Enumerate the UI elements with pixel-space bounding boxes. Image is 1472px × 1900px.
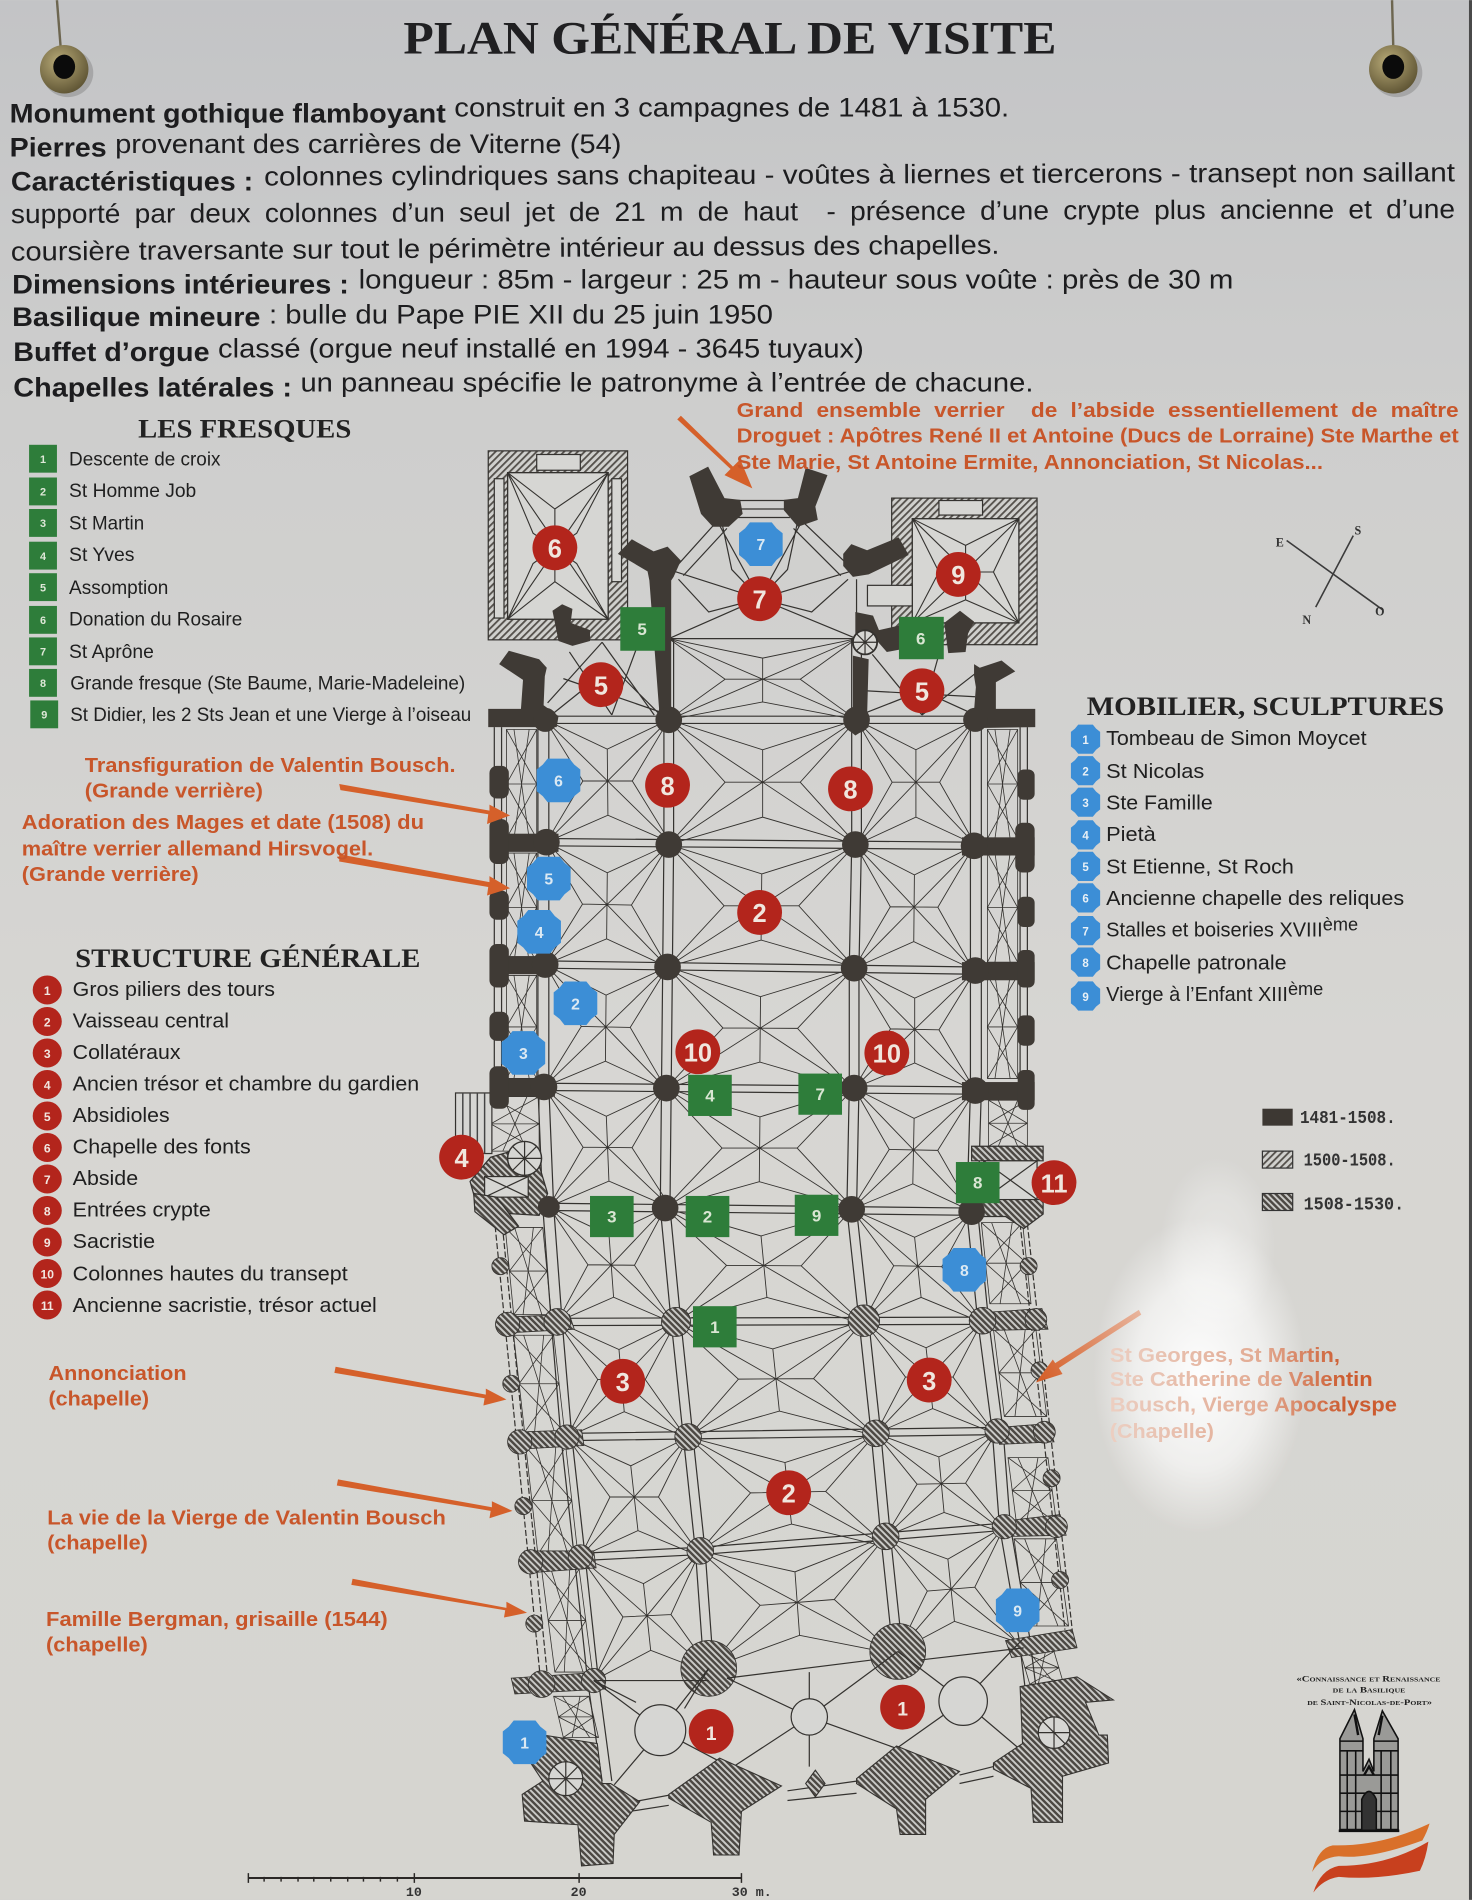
intro text block: Chapelles latérales : [13,372,292,402]
legend list: structure: 4 [44,1078,51,1092]
legend list: mobilier: 1 [1082,735,1089,747]
intro text block: provenant des carrières de Viterne (54) [115,129,622,159]
intro text block: Monument gothique flamboyant [10,99,446,129]
scale bar: 30 m. [732,1885,772,1900]
legend list: fresques: 1 [40,454,46,466]
compass: N [1302,613,1311,627]
markers on plan: green fresques: 9 [812,1206,821,1225]
callout: Adoration des Mages: maître verrier allemand Hirsvogel. [22,839,373,861]
legend list: structure: Abside [73,1168,138,1190]
callout: Annonciation: Annonciation [48,1363,187,1385]
legend list: fresques: 5 [40,582,46,594]
legend list: fresques: 8 [40,678,46,690]
scale bar: 20 [571,1885,587,1900]
legend list: structure: 7 [44,1173,51,1187]
heading: structure générale: STRUCTURE GÉNÉRALE [75,943,420,973]
legend list: structure: Ancienne sacristie, trésor actuel [73,1295,377,1317]
logo text: de la Basilique [1333,1686,1405,1695]
legend list: mobilier: St Etienne, St Roch [1106,857,1294,879]
markers on plan: green fresques: 3 [607,1208,617,1227]
markers on plan: blue mobilier: 1 [520,1735,529,1752]
legend list: fresques: St Yves [69,544,134,566]
callout: La vie de la Vierge: (chapelle) [47,1533,148,1555]
legend list: mobilier: 9 [1082,992,1089,1004]
legend list: mobilier: Ancienne chapelle des reliques [1106,888,1404,910]
intro text block [10,92,1456,402]
legend item: 1481-1508 [1262,1109,1396,1129]
legend item: 1500-1508: 1500-1508. [1304,1152,1396,1172]
markers on plan: green fresques [590,607,1000,1347]
legend list: mobilier: St Nicolas [1106,761,1204,783]
legend list: mobilier: ème [1288,979,1323,999]
scale bar [248,1873,772,1900]
callout: abside glass: Droguet : Apôtres René II et Antoine (Ducs de Lorraine) Ste Marthe et [737,425,1459,447]
markers on plan: red structure: 10 [873,1041,901,1069]
legend list: fresques: Donation du Rosaire [69,608,242,630]
legend list: mobilier: Tombeau de Simon Moycet [1106,728,1367,750]
markers on plan: red structure: 7 [753,586,767,614]
nave piers, campaign 1508-1530 [492,1258,1077,1698]
arrow: St Georges chapel [1036,1310,1141,1383]
markers on plan: red structure: 1 [706,1723,717,1745]
markers on plan: blue mobilier: 3 [519,1046,528,1063]
legend list: fresques: Grande fresque (Ste Baume, Marie-Madeleine) [70,673,465,695]
legend list: structure: Absidioles [73,1105,170,1127]
intro text block: colonnes cylindriques sans chapiteau - voûtes à liernes et tiercerons - transept non saillant [264,157,1456,192]
callout: St Georges, faded by glare: (Chapelle) [1110,1421,1214,1443]
icon: basilica facade [1339,1710,1399,1831]
legend list: fresques: 9 [41,710,47,722]
legend list: mobilier: 8 [1082,958,1089,970]
legend list: structure: 8 [44,1204,51,1218]
intro text block: Basilique mineure [12,302,260,332]
chapel lattices [491,730,1069,1737]
legend list: structure: 3 [44,1047,51,1061]
legend list: fresques: St Aprône [69,641,154,663]
legend list: mobilier: Chapelle patronale [1106,952,1287,974]
callout: Adoration des Mages: (Grande verrière) [22,864,199,886]
doubled transverse and longitudinal ribs [538,639,1043,1781]
west spiral stairs [549,1717,1070,1796]
compass: O [1375,605,1385,619]
intro text block: construit en 3 campagnes de 1481 à 1530. [454,92,1009,122]
callout: La vie de la Vierge: La vie de la Vierge de Valentin Bousch [47,1507,446,1529]
callout: St Georges, faded by glare: St Georges, St Martin, [1110,1345,1340,1367]
legend list: structure: 1 [44,984,51,998]
markers on plan: red structure: 8 [843,777,858,805]
legend: building campaigns [1262,1109,1404,1215]
callout: Famille Bergman [46,1609,388,1656]
legend list: fresques: Assomption [69,577,168,599]
panel: structure générale legend [33,943,420,1320]
callout: Famille Bergman: Famille Bergman, grisaille (1544) [46,1609,388,1631]
markers on plan: green fresques: 5 [637,620,647,639]
legend list: structure: 2 [44,1015,51,1029]
legend list: structure: Entrées crypte [73,1200,211,1222]
callout: abside glass: Grand ensemble verrier de l’abside essentiellement de maître [737,400,1459,422]
legend list: mobilier: 5 [1082,862,1089,874]
markers on plan: green fresques: 1 [710,1318,720,1337]
compass: E [1276,536,1284,550]
markers on plan: red structure: 11 [1041,1170,1067,1198]
markers on plan: blue mobilier [502,522,1039,1764]
compass: S [1354,523,1361,537]
transept south porch [972,1146,1043,1229]
floor plan of the basilica [456,451,1113,1866]
markers on plan: green fresques: 2 [703,1208,712,1227]
spiral stair near sacristy [853,630,877,654]
arrow: Transfiguration window [339,784,510,824]
intro text block: un panneau spécifie le patronyme à l’entrée de chacune. [300,367,1033,397]
intro text block: Pierres [10,132,107,162]
apse ribs [548,501,976,715]
markers on plan: red structure: 2 [782,1480,796,1508]
legend item: 1508-1530: 1508-1530. [1304,1195,1404,1215]
hanging string right [1392,0,1393,46]
legend list: mobilier: ème [1323,915,1358,935]
legend list: structure: Collatéraux [73,1042,181,1064]
legend item: 1500-1508 [1262,1151,1396,1172]
legend list: structure: 9 [44,1236,51,1250]
legend list: fresques: 3 [40,518,46,530]
legend list: structure [33,975,419,1320]
legend list: mobilier: Stalles et boiseries XVIII [1106,920,1323,942]
vaults [544,639,1016,1681]
markers on plan: red structure: 3 [922,1368,936,1396]
title: PLAN GÉNÉRAL DE VISITE [403,12,1056,63]
compass [1276,523,1384,627]
transept north porch [456,1093,548,1235]
legend list: mobilier: 2 [1082,767,1089,779]
markers on plan: blue mobilier: 5 [544,872,553,889]
legend list: mobilier: 3 [1082,798,1089,810]
markers on plan: red structure: 10 [684,1039,712,1067]
markers on plan: red structure: 8 [660,773,675,801]
legend list: fresques: 7 [40,647,46,659]
markers on plan: blue mobilier: 8 [960,1263,969,1280]
intro text block: coursière traversante sur tout le périmètre intérieur au dessus des chapelles. [11,230,1000,267]
markers on plan: red structure: 3 [616,1369,630,1397]
icon: right grommet [1369,45,1422,97]
intro text block: Caractéristiques : [11,166,253,196]
markers on plan: green fresques: 6 [916,630,925,649]
callout: Annonciation [48,1363,187,1411]
legend list: structure: Sacristie [73,1231,155,1253]
legend list: fresques: St Didier, les 2 Sts Jean et une Vierge à l’oiseau [70,704,471,726]
legend item: 1508-1530 [1262,1194,1404,1215]
markers on plan: green fresques: 4 [705,1086,715,1105]
legend list: structure: Chapelle des fonts [73,1137,251,1159]
legend list: structure: Ancien trésor et chambre du gardien [73,1074,419,1096]
markers on plan: blue mobilier: 2 [571,996,580,1013]
callout: abside glass [737,400,1459,474]
legend list: mobilier: Ste Famille [1106,792,1213,814]
markers on plan: red structure: 5 [915,678,929,706]
callout: Famille Bergman: (chapelle) [46,1634,148,1656]
legend list: mobilier: Pietà [1106,824,1157,846]
legend list: structure: 11 [41,1299,54,1313]
markers on plan: blue mobilier: 4 [535,925,544,942]
apse piers and buttresses, campaign 1481-1508 [488,467,1035,1225]
legend list: fresques: 6 [40,615,46,627]
markers on plan: blue mobilier: 9 [1013,1603,1022,1620]
callout: St Georges, faded by glare: Bousch, Vierge Apocalyspe [1110,1395,1397,1417]
intro text block: supporté par deux colonnes d’un seul jet de 21 m de haut - présence d’une crypte plus ancienne et d’une [11,194,1455,229]
legend list: structure: 6 [44,1141,51,1155]
markers on plan: red structure [439,525,1076,1754]
legend list: structure: Gros piliers des tours [73,979,275,1001]
logo text [1296,1675,1441,1707]
arrow: Adoration window [339,854,510,895]
legend list: fresques: Descente de croix [69,448,221,470]
arrow: Annonciation [334,1367,506,1406]
arrow: Vie de la Vierge [337,1479,512,1518]
panel: les fresques legend [29,414,471,728]
logo text: «Connaissance et Renaissance [1296,1675,1441,1684]
intro text block: Buffet d’orgue [13,337,210,367]
legend list: structure: 10 [41,1267,54,1281]
logo: Connaissance et Renaissance [1296,1675,1441,1893]
callout: Transfiguration: (Grande verrière) [85,780,263,802]
intro text block: longueur : 85m - largeur : 25 m - hauteur sous voûte : près de 30 m [359,265,1233,295]
legend list: mobilier: 4 [1082,831,1089,843]
legend list: mobilier: 7 [1082,926,1089,938]
left chapel tower [488,451,628,640]
callout: abside glass: Ste Marie, St Antoine Ermite, Annonciation, St Nicolas... [737,452,1323,474]
callout: Adoration des Mages [22,812,424,886]
callout: Transfiguration [85,755,456,802]
markers on plan: red structure: 2 [753,900,767,928]
markers on plan: red structure: 6 [548,535,562,563]
callout: Annonciation: (chapelle) [48,1389,149,1411]
intro text block: : bulle du Pape PIE XII du 25 juin 1950 [269,300,773,330]
scale bar: 10 [406,1885,422,1900]
callout: Transfiguration: Transfiguration de Valentin Bousch. [85,755,456,777]
legend list: fresques: St Martin [69,513,144,535]
legend list: fresques: 4 [40,551,46,563]
legend list: structure: Colonnes hautes du transept [73,1264,348,1286]
markers on plan: blue mobilier: 6 [554,773,563,790]
legend list: structure: Vaisseau central [73,1011,229,1033]
icon: orange flag swoosh [1312,1824,1430,1893]
legend list: fresques: St Homme Job [69,480,196,502]
legend list: mobilier: 6 [1082,894,1089,906]
legend list: mobilier [1071,725,1404,1011]
icon: left grommet [40,45,93,97]
markers on plan: blue mobilier: 7 [756,537,765,554]
arrow: Famille Bergman [351,1579,527,1618]
logo text: de Saint-Nicolas-de-Port» [1307,1698,1432,1707]
markers on plan: red structure: 1 [897,1699,908,1721]
sacristy tower [867,498,1037,645]
heading: les fresques: LES FRESQUES [138,414,351,444]
panel: mobilier, sculptures legend [1071,691,1444,1011]
legend list: fresques [29,445,471,728]
intro text block: Dimensions intérieures : [12,269,349,299]
markers on plan: green fresques: 7 [815,1085,825,1104]
callout: St Georges, faded by glare: Ste Catherine de Valentin [1110,1369,1373,1391]
markers on plan: red structure: 5 [594,672,608,700]
west bays [594,1638,1024,1814]
legend list: structure: 5 [44,1110,51,1124]
heading: mobilier, sculptures: MOBILIER, SCULPTURES [1087,691,1444,721]
legend list: fresques: 2 [40,487,46,499]
markers on plan: green fresques: 8 [973,1174,982,1193]
arrow: abside windows [677,416,752,488]
intro text block: classé (orgue neuf installé en 1994 - 3645 tuyaux) [218,334,864,364]
west facade buttresses [522,1677,1113,1866]
legend item: 1481-1508: 1481-1508. [1300,1109,1396,1129]
legend list: mobilier: Vierge à l’Enfant XIII [1106,984,1288,1006]
hanging string left [57,0,61,46]
callout: St Georges, faded by glare [1110,1345,1397,1443]
outer walls [494,727,1072,1690]
callout: Adoration des Mages: Adoration des Mages et date (1508) du [22,812,424,834]
markers on plan: red structure: 9 [951,562,965,590]
callout: La vie de la Vierge [47,1507,446,1555]
markers on plan: red structure: 4 [455,1145,470,1173]
